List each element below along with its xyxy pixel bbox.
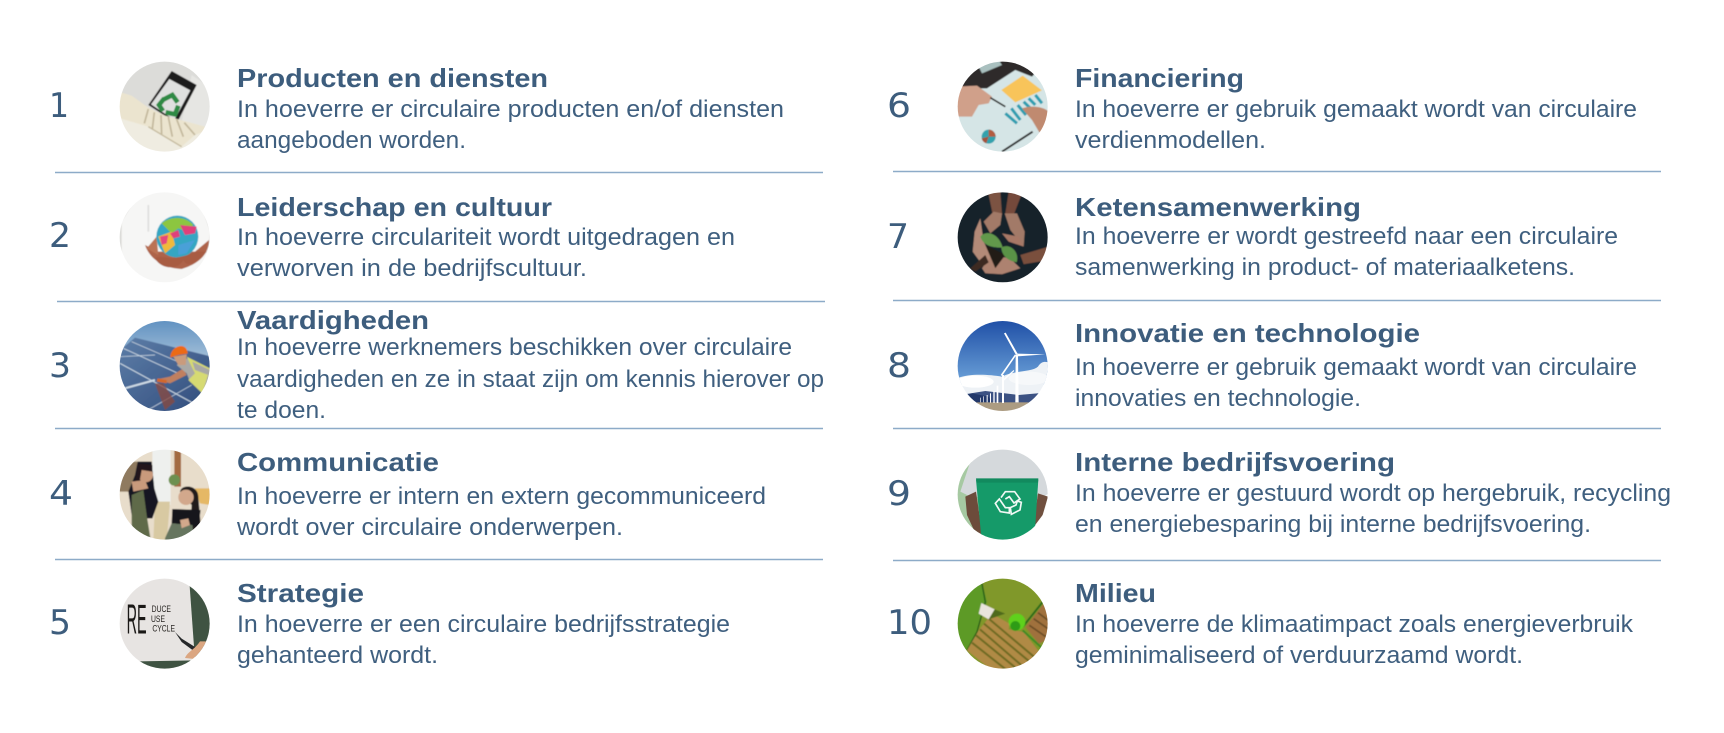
description: In hoeverre er gebruik gemaakt wordt van circulaire — [1075, 96, 1637, 123]
photo: hands around a green seedling — [958, 192, 1048, 282]
number 8: 8 — [887, 346, 911, 386]
number 10: 10 — [887, 603, 932, 643]
description: verworven in de bedrijfscultuur. — [237, 255, 587, 282]
description: verdienmodellen. — [1075, 127, 1266, 154]
description — [1075, 223, 1618, 281]
heading: Producten en diensten — [237, 63, 548, 93]
description — [1075, 96, 1637, 154]
photo: hand writing reduce reuse recycle on paper — [120, 578, 210, 669]
description: geminimaliseerd of verduurzaamd wordt. — [1075, 642, 1523, 669]
description: In hoeverre er gestuurd wordt op hergebruik, recycling — [1075, 480, 1671, 507]
heading: Strategie — [237, 578, 364, 608]
item 9: Interne bedrijfsvoering — [889, 450, 1670, 540]
photo: hand writing reduce reuse recycle on paper: DUCE — [152, 604, 171, 614]
description: en energiebesparing bij interne bedrijfsvoering. — [1075, 511, 1591, 538]
photo: hands holding a colourful globe — [120, 192, 210, 282]
description: samenwerking in product- of materiaalketens. — [1075, 254, 1575, 281]
heading: Interne bedrijfsvoering — [1075, 447, 1395, 477]
number 6: 6 — [887, 86, 911, 126]
description — [237, 224, 735, 282]
photo: phone with recycling symbol in cotton bag — [120, 62, 210, 152]
item 4: Communicatie — [50, 450, 764, 540]
heading: Leiderschap en cultuur — [237, 192, 552, 222]
photo: hand writing reduce reuse recycle on paper: RE — [127, 595, 147, 642]
description: wordt over circulaire onderwerpen. — [236, 514, 623, 541]
description — [236, 483, 766, 541]
number 3: 3 — [49, 346, 71, 386]
photo: aerial view of farm fields — [958, 578, 1048, 669]
heading: Ketensamenwerking — [1075, 192, 1361, 222]
photo: two women talking in a studio — [120, 450, 210, 540]
number 4: 4 — [49, 474, 73, 514]
description — [1075, 611, 1634, 669]
heading: Communicatie — [237, 447, 439, 477]
heading: Financiering — [1075, 63, 1244, 93]
photo: person holding a green recycling bin — [958, 450, 1048, 540]
heading: Vaardigheden — [237, 305, 429, 335]
description — [237, 334, 824, 424]
item 1: Producten en diensten — [49, 58, 784, 155]
number 1: 1 — [49, 86, 69, 126]
item 10: Milieu — [890, 578, 1633, 669]
photo: hand writing reduce reuse recycle on paper: CYCLE — [152, 623, 175, 633]
description: aangeboden worden. — [237, 127, 466, 154]
description — [1075, 480, 1671, 538]
description: In hoeverre circulariteit wordt uitgedragen en — [237, 224, 735, 251]
description: In hoeverre er gebruik gemaakt wordt van circulaire — [1075, 354, 1637, 381]
heading: Innovatie en technologie — [1075, 318, 1420, 348]
description — [237, 96, 784, 154]
description: In hoeverre werknemers beschikken over circulaire — [237, 334, 792, 361]
item 3: Vaardigheden — [49, 305, 824, 424]
item 6: Financiering — [887, 58, 1637, 155]
number 7: 7 — [887, 217, 909, 257]
description: In hoeverre er intern en extern gecommuniceerd — [237, 483, 766, 510]
item 5: Strategie — [49, 575, 730, 675]
description: In hoeverre er circulaire producten en/of diensten — [237, 96, 784, 123]
photo: hand writing reduce reuse recycle on paper: USE — [151, 614, 165, 624]
photo: technician installing solar panels — [120, 321, 210, 411]
number 2: 2 — [49, 216, 71, 256]
item 7: Ketensamenwerking — [887, 188, 1618, 288]
description: In hoeverre er een circulaire bedrijfsstrategie — [237, 611, 730, 638]
description: In hoeverre er wordt gestreefd naar een circulaire — [1075, 223, 1618, 250]
heading: Milieu — [1075, 578, 1156, 608]
description: innovaties en technologie. — [1075, 385, 1361, 412]
number 5: 5 — [49, 603, 71, 643]
number 9: 9 — [887, 474, 911, 514]
item 8: Innovatie en technologie — [887, 318, 1637, 416]
description — [237, 611, 730, 669]
item 2: Leiderschap en cultuur — [52, 192, 734, 282]
description: gehanteerd wordt. — [237, 642, 438, 669]
photo: hands pointing at financial charts — [958, 62, 1048, 152]
photo: wind turbines under blue sky — [958, 321, 1048, 411]
description — [1075, 354, 1637, 412]
description: te doen. — [237, 397, 326, 424]
description: In hoeverre de klimaatimpact zoals energieverbruik — [1075, 611, 1634, 638]
description: vaardigheden en ze in staat zijn om kennis hierover op — [237, 366, 824, 393]
